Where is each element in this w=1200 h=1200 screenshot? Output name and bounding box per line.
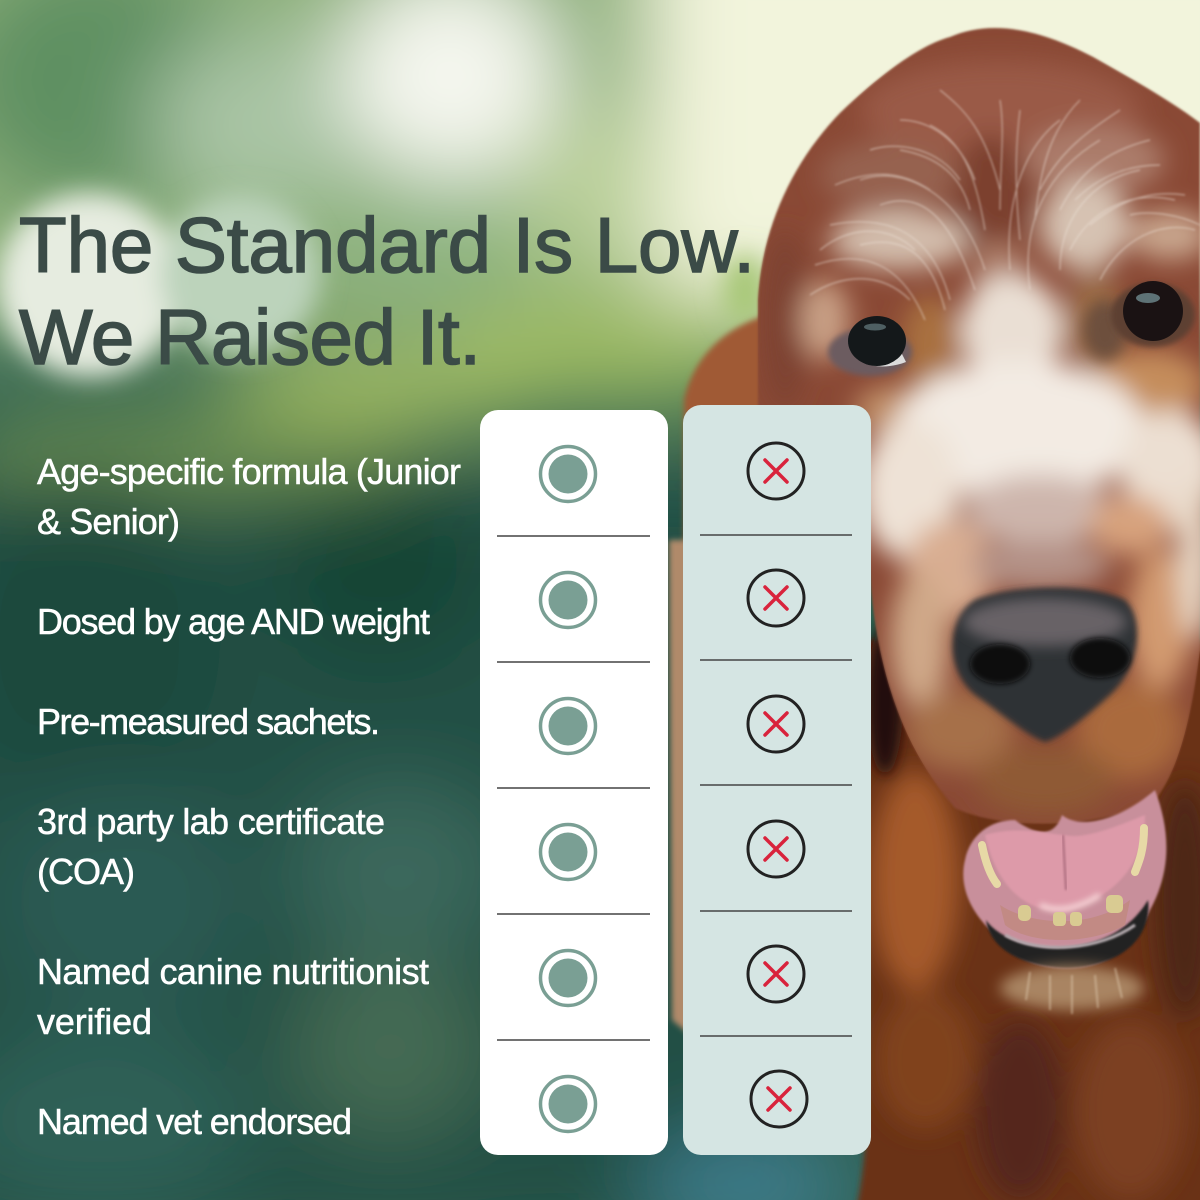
feature: age-specific formula [37,451,461,542]
feature: canine nutritionist [37,951,429,1042]
feature: lab certificate [37,801,385,892]
dog photo: ear and neck [669,310,1200,1200]
feature: pre-measured sachets: Pre-measured sachets. [37,701,380,742]
icon: dog nose [952,588,1137,742]
title: The Standard Is Low. [19,201,755,289]
feature list [37,451,461,1142]
fur strokes [810,90,1200,320]
icon: dog eyes [828,281,1195,376]
feature: vet endorsed: Named vet endorsed [37,1101,352,1142]
icon: dog mouth [963,790,1166,1014]
title: We Raised It. [19,293,481,381]
feature: lab certificate: 3rd party lab certificate [37,801,385,842]
panel: others column [683,405,871,1155]
icons: red cross circles [748,443,807,1127]
feature: lab certificate: (COA) [37,851,135,892]
dog head [758,28,1200,824]
panel: our brand column [480,410,668,1155]
feature: canine nutritionist: Named canine nutritionist [37,951,429,992]
feature: age-specific formula: & Senior) [37,501,180,542]
title [19,201,755,381]
icons: green check circles [540,446,596,1132]
feature: age-specific formula: Age-specific formula (Junior [37,451,461,492]
feature: dosed by age and weight: Dosed by age AND weight [37,601,430,642]
feature: canine nutritionist: verified [37,1001,152,1042]
